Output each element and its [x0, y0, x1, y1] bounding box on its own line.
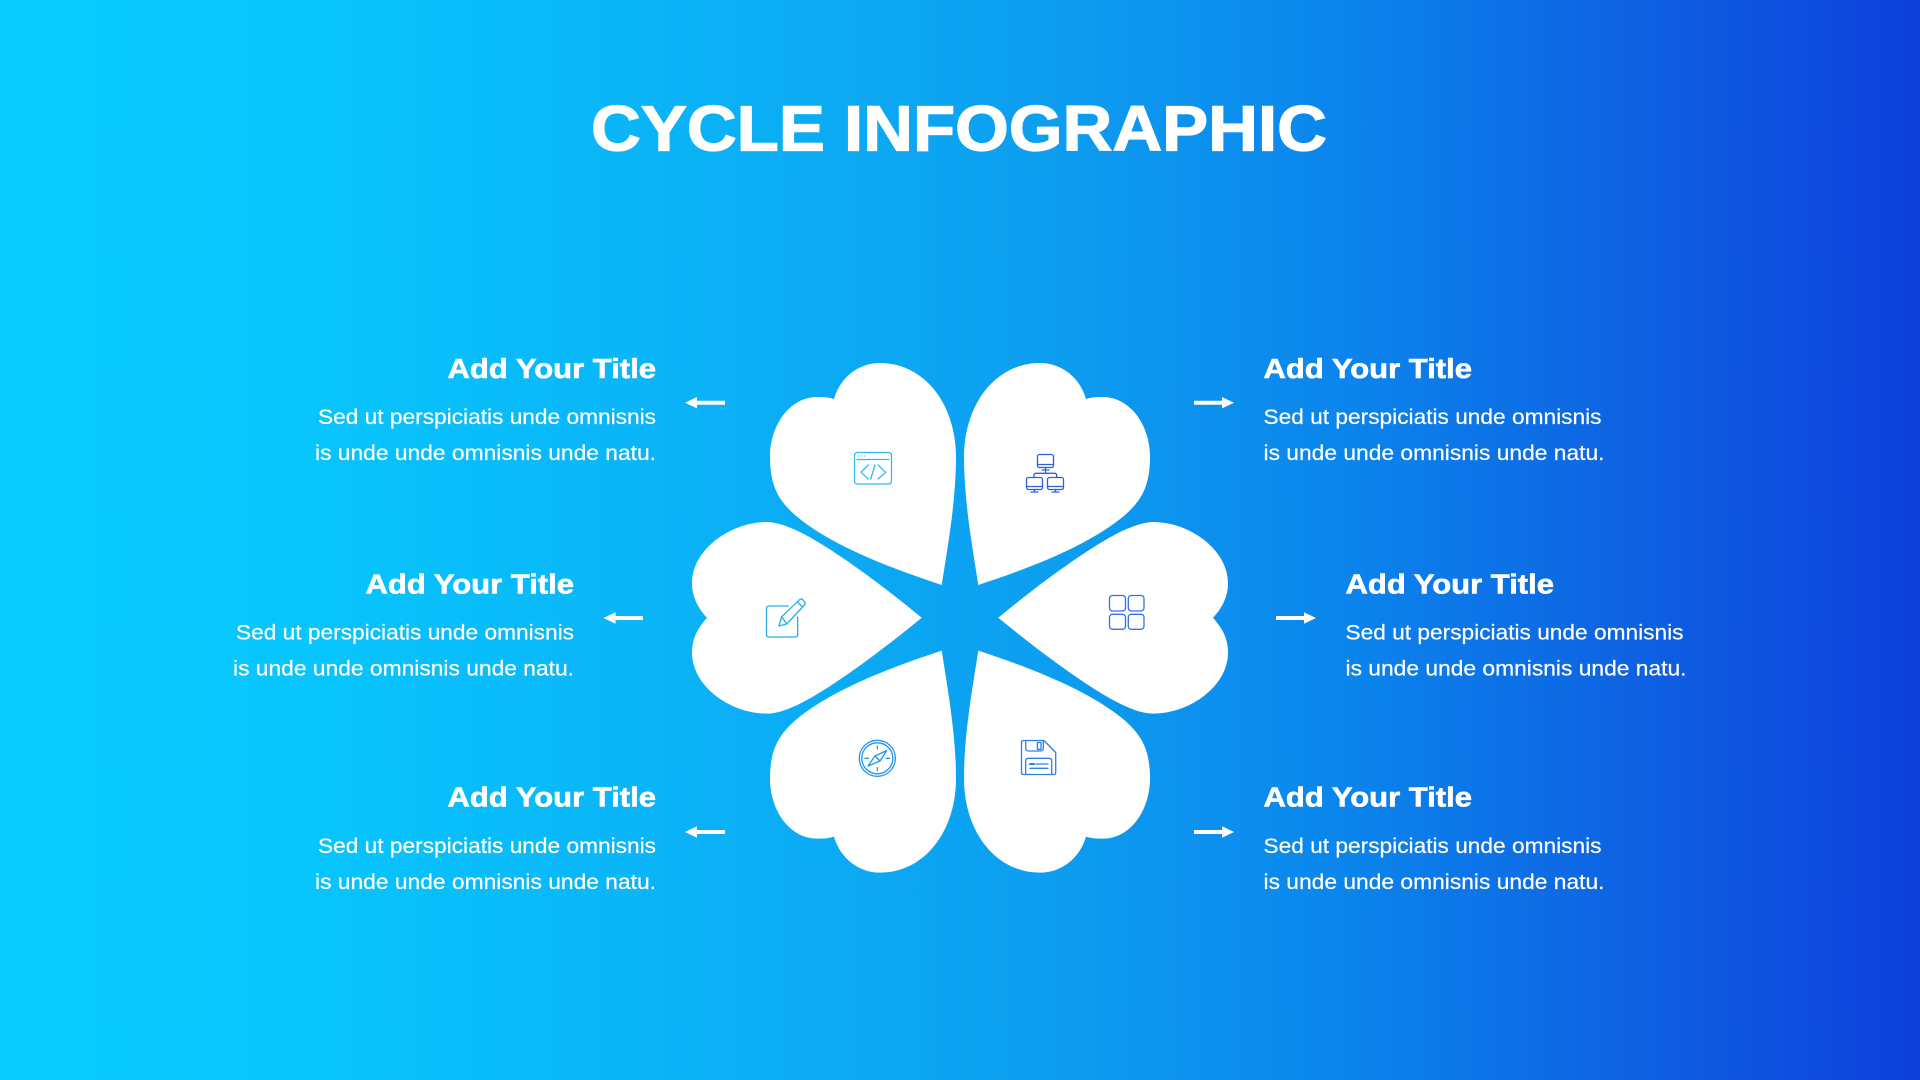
icon: app grid — [1110, 596, 1144, 629]
text block: middle left — [233, 568, 574, 680]
text block: bottom left — [315, 782, 656, 894]
text block: middle left: Sed ut perspiciatis unde omnisnis — [236, 622, 574, 644]
arrow: middle right — [1276, 612, 1316, 624]
icon: network — [1026, 454, 1064, 492]
text block: top right: Add Your Title — [1264, 353, 1472, 384]
text block: bottom right: is unde unde omnisnis unde natu. — [1264, 871, 1604, 894]
arrow: bottom left — [685, 826, 725, 838]
text block: top left: Add Your Title — [448, 353, 656, 384]
panel: petal top right with network icon — [964, 363, 1150, 585]
text block: top right: Sed ut perspiciatis unde omnisnis — [1264, 406, 1602, 429]
text block: middle left: is unde unde omnisnis unde natu. — [233, 658, 574, 680]
text block: middle right — [1346, 568, 1686, 680]
text block: bottom right: Add Your Title — [1264, 782, 1472, 812]
text block: top right: is unde unde omnisnis unde natu. — [1264, 442, 1604, 465]
text block: bottom right: Sed ut perspiciatis unde omnisnis — [1264, 835, 1602, 858]
arrow: middle left — [604, 612, 643, 624]
icon: code window — [854, 452, 892, 484]
text block: top left: is unde unde omnisnis unde natu. — [315, 442, 656, 465]
panel: petal bottom left with compass icon — [770, 651, 956, 873]
text block: top right — [1264, 353, 1604, 465]
title: CYCLE INFOGRAPHIC — [591, 92, 1327, 164]
text block: middle left: Add Your Title — [366, 568, 574, 600]
arrow: bottom right — [1194, 826, 1234, 838]
text block: middle right: is unde unde omnisnis unde natu. — [1346, 658, 1686, 680]
arrow: top right — [1194, 397, 1234, 408]
panel: petal bottom right with floppy icon — [964, 651, 1150, 873]
text block: middle right: Sed ut perspiciatis unde omnisnis — [1346, 622, 1684, 644]
text block: top left: Sed ut perspiciatis unde omnisnis — [318, 406, 656, 429]
icon: compass — [859, 740, 895, 776]
text block: bottom right — [1264, 782, 1604, 894]
arrow: top left — [685, 397, 725, 408]
text block: bottom left: is unde unde omnisnis unde natu. — [315, 871, 656, 894]
text block: top left — [315, 353, 656, 465]
icon: floppy disk — [1022, 740, 1056, 774]
panel: petal middle left with edit icon — [692, 522, 922, 714]
icon: edit pencil — [766, 599, 805, 637]
text block: bottom left: Add Your Title — [448, 782, 656, 812]
panel: petal middle right with grid icon — [998, 522, 1228, 714]
panel: petal top left with code icon — [770, 363, 956, 585]
text block: middle right: Add Your Title — [1346, 568, 1554, 600]
text block: bottom left: Sed ut perspiciatis unde omnisnis — [318, 835, 656, 858]
